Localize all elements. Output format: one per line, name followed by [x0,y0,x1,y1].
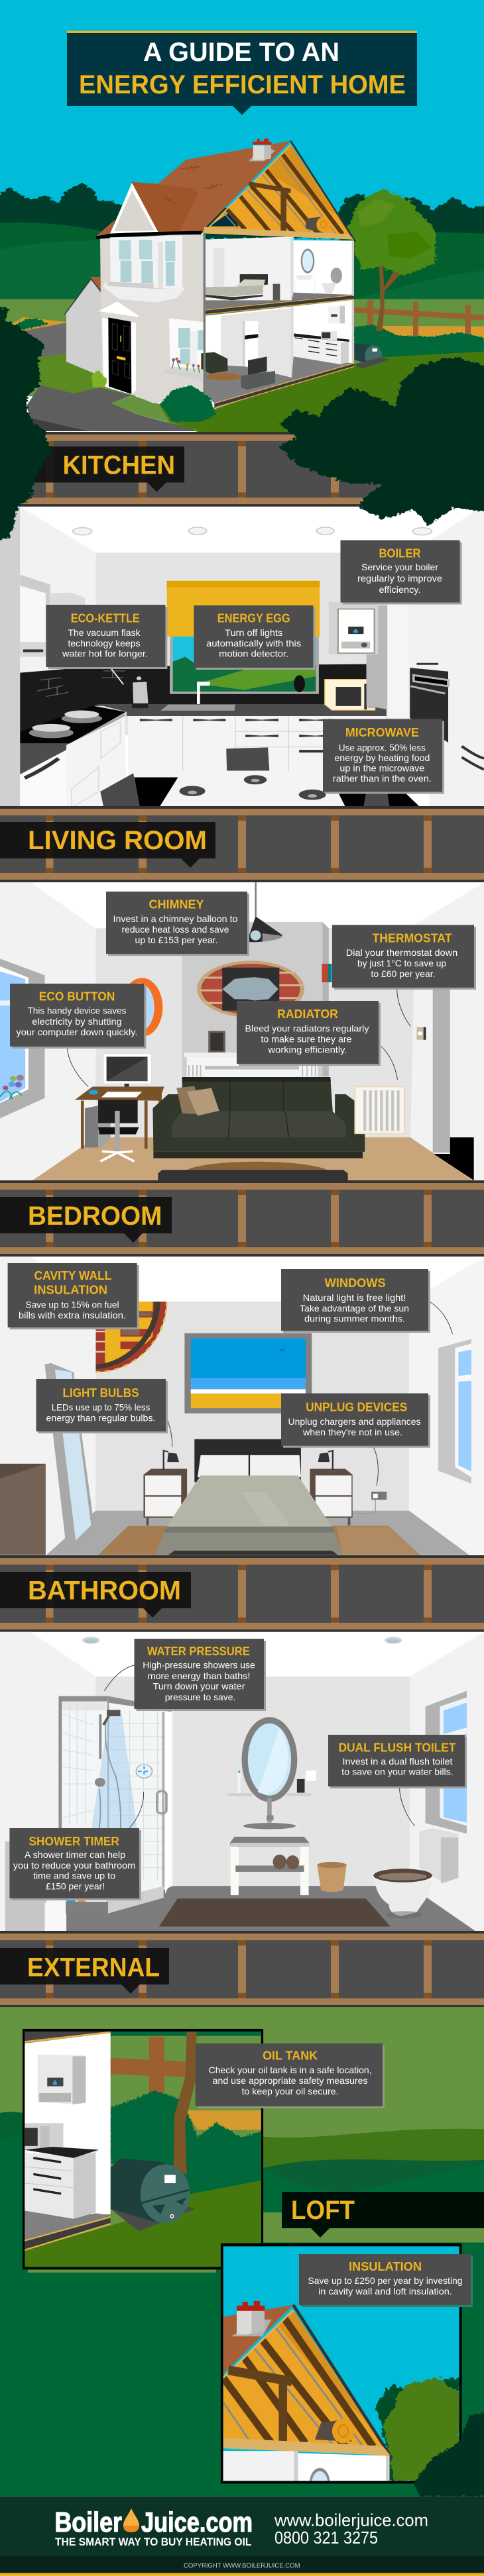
right window [438,1339,471,1484]
tap and sink [159,682,235,711]
boiler [328,306,345,323]
callout: radiator [237,1001,381,1066]
callout: windows [281,1269,430,1333]
ceiling lights [73,527,432,535]
carpet floor [32,1137,473,1180]
orange mirror [121,978,162,1037]
left foreground tree [0,305,51,543]
lower rooms [201,300,353,403]
callout: chimney [106,892,249,956]
extractor hood [49,593,85,605]
callout: shower timer: £150 per year! [46,1880,105,1891]
callout: thermostat [332,925,476,990]
section heading: external: EXTERNAL [27,1953,160,1982]
side table [263,284,280,300]
callout: cavity wall insulation: Save up to 15% on fuel [25,1300,119,1310]
section heading: bathroom: BATHROOM [28,1576,181,1606]
fireplace [184,1053,323,1077]
callout: eco-kettle: water hot for longer. [62,648,148,658]
right pillar [433,988,474,1180]
meadow [0,299,484,396]
insulation roll [315,2420,352,2442]
oil tank [354,344,390,369]
microwave [325,680,375,710]
orange strip [185,2110,261,2130]
kitchen units [25,2147,99,2219]
bottom right tree [414,2412,484,2497]
floor mirror [45,1363,94,1549]
pointer lines [67,988,410,1087]
chimney balloon cutaway [197,960,304,1017]
rug [206,373,241,380]
tv unit [248,356,267,376]
eaves [96,231,201,239]
energy egg [294,675,305,692]
boiler [329,601,378,654]
background: sky [0,0,484,331]
callout: insulation [299,2254,473,2307]
pointer lines [104,1665,415,1828]
callout: thermostat: by just 1°C to save up [357,958,446,968]
callout: eco-kettle: technology keeps [68,638,141,648]
ground floor window [164,319,204,381]
background trees [375,2378,459,2481]
bed [155,1475,343,1555]
section heading: loft: LOFT [291,2196,355,2225]
small shrub [91,370,107,387]
radiator [355,1087,404,1133]
chimney [249,138,275,161]
roof slipped tiles [164,166,222,204]
side tall cupboards [367,603,484,770]
section heading: bedroom: BEDROOM [28,1202,162,1231]
main field [0,2132,484,2497]
section heading: bathroom [0,1572,191,1618]
callout: oil tank [196,2043,385,2108]
tap and basin [239,1798,301,1839]
callout: radiator: Bleed your radiators regularly [245,1023,369,1033]
callout: eco-kettle: ECO-KETTLE [71,611,140,625]
fence [354,300,484,337]
panel: oil tank scene [23,2029,263,2269]
worktop [95,704,387,716]
house cross-section illustration [64,138,355,409]
toilet [373,1828,458,1918]
callout: oil tank: OIL TANK [263,2048,318,2063]
callout: dual flush toilet [328,1735,467,1788]
panel: bedroom scene [0,1257,484,1555]
lawn [25,2181,261,2267]
callout: microwave: Use approx. 50% less [339,742,426,752]
right window [426,1691,467,1833]
callout: insulation: in cavity wall and loft insulation. [318,2286,452,2296]
callout: water pressure: pressure to save. [165,1692,235,1702]
fence [110,2036,186,2094]
treeline [0,183,484,238]
gable [110,183,158,234]
callout: thermostat: THERMOSTAT [373,931,452,945]
pointer lines [166,1302,453,1486]
logo tagline: THE SMART WAY TO BUY HEATING OIL [55,2536,252,2548]
callout: thermostat: Dial your thermostat down [346,947,457,958]
roof [223,2305,293,2374]
callout: unplug devices: when they're not in use. [302,1427,402,1437]
callout: eco-kettle: The vacuum flask [68,627,141,638]
callout: radiator: RADIATOR [277,1007,338,1021]
callout: oil tank: Check your oil tank is in a safe location, [209,2065,372,2075]
right foreground tree [279,358,484,525]
armchair [201,352,227,374]
title line two: ENERGY EFFICIENT HOME [79,70,406,99]
road lower [28,418,90,431]
callout: boiler: BOILER [379,546,420,560]
desk and computer [75,1054,164,1161]
foliage [347,189,436,276]
callout: water pressure [134,1639,266,1711]
logo: oil drop icon [123,2508,139,2532]
callout: unplug devices: Unplug chargers and appliances [288,1416,420,1427]
callout: dual flush toilet: Invest in a dual flush toilet [342,1756,453,1767]
callout: radiator: working efficiently. [267,1045,347,1055]
callout: eco button: This handy device saves [28,1005,126,1016]
waste basket [317,1862,347,1892]
socket and cable [353,1492,387,1514]
landscape behind the house [0,183,484,396]
dining table and chairs [100,747,419,806]
loft insulation [223,2310,390,2457]
title line one: A GUIDE TO AN [143,38,339,67]
callout: energy egg: automatically with this [206,638,301,648]
callout: microwave: rather than in the oven. [333,773,432,784]
callout: windows: Natural light is free light! [303,1292,406,1303]
callout: cavity wall insulation: INSULATION [34,1282,107,1297]
callout: water pressure: more energy than baths! [148,1671,250,1681]
beam band: kitchen [0,432,484,507]
left hill [0,2112,25,2141]
tree corner [242,2255,261,2267]
callout: boiler: efficiency. [379,584,420,595]
trunk [376,254,415,331]
floor slab upper [204,294,354,315]
floor slab [25,2217,111,2250]
oval mirror [242,1717,297,1802]
section heading: living room: LIVING ROOM [28,826,207,855]
callout: water pressure: Turn down your water [152,1681,245,1692]
panel: loft scene [221,2243,461,2498]
pointer kettle [111,668,123,684]
ceiling lamp [247,882,282,942]
callout: water pressure: WATER PRESSURE [147,1644,250,1658]
bed headboard and pillows [194,1439,301,1482]
bed [240,274,268,285]
hob [20,706,126,774]
logo: brand name: Boiler [54,2506,122,2538]
callout: eco button: your computer down quickly. [16,1027,138,1037]
beam band: living room [0,806,484,882]
callout: shower timer: SHOWER TIMER [29,1834,119,1848]
section heading: bedroom [0,1197,172,1243]
flowers [172,358,200,373]
callout: oil tank: to keep your oil secure. [242,2086,339,2096]
chimney breast [182,922,332,1076]
shower cubicle [58,1696,173,1914]
kitchen units [294,333,349,364]
callout: shower timer: A shower timer can help [25,1849,125,1860]
facade [100,233,204,403]
window blind [166,581,320,637]
main roof [131,141,290,232]
callout: windows: WINDOWS [325,1276,386,1290]
callout: shower timer: time and save up to [33,1871,115,1881]
walls below [223,2451,390,2481]
callout: light bulbs: energy than regular bulbs. [46,1413,155,1423]
callout: boiler: regularly to improve [357,573,442,584]
callout: energy egg: motion detector. [219,648,288,658]
callout: cavity wall insulation: bills with extra insulation. [19,1310,126,1321]
front door [99,301,138,395]
callout: windows: Take advantage of the sun [300,1303,409,1314]
light lawn patch [111,395,201,431]
wall cupboard [20,575,50,657]
microwave [25,2123,63,2151]
beam band: bedroom [0,1180,484,1257]
gravel drive [27,386,201,431]
ground around the house [0,300,484,372]
right tree [347,189,436,331]
front bush [160,386,216,422]
panel: kitchen scene [0,505,484,806]
section heading: living room [0,822,215,868]
callout: eco button: electricity by shutting [32,1016,122,1027]
front lawn [111,352,484,433]
loft floor [223,2438,391,2455]
nightstands [143,1468,353,1525]
rug and tv bench [158,1162,348,1181]
hills [0,223,484,331]
vanity stand [230,1837,309,1895]
callout: light bulbs [36,1379,168,1433]
section heading: kitchen [30,446,184,491]
section heading: kitchen: KITCHEN [62,450,175,480]
callout: eco button: ECO BUTTON [39,990,115,1003]
callout: unplug devices: UNPLUG DEVICES [306,1400,407,1414]
left lawn [32,353,107,393]
callout: dual flush toilet: to save on your water bills. [341,1767,454,1777]
bedside lamps [157,1451,339,1472]
backsplash [20,664,367,731]
callout: chimney: CHIMNEY [149,897,204,911]
sink [295,276,313,280]
bushes behind the oil tank [354,325,484,359]
cabinet lower left [5,1841,108,1931]
callout: energy egg [194,605,315,670]
picture frame [208,1031,225,1053]
section heading: external [0,1948,169,1994]
title banner [67,30,417,115]
microwave [321,331,337,340]
bush on the left [13,319,48,331]
loft cutaway [204,141,355,242]
callout: light bulbs: LEDs use up to 75% less [52,1402,150,1412]
callout: light bulbs: LIGHT BULBS [62,1386,139,1400]
cavity wall cutaway [95,1302,170,1375]
callout: windows: during summer months. [304,1314,405,1324]
callout: microwave: up in the microwave [339,763,425,774]
callout: dual flush toilet: DUAL FLUSH TOILET [338,1741,456,1754]
bay window upper [103,236,186,303]
callout: boiler: Service your boiler [361,562,438,572]
trunk [174,2032,197,2175]
phone: 0800 321 3275 [274,2528,378,2548]
beam band: bathroom [0,1555,484,1632]
shelves with toothbrush and shaver [228,1771,316,1796]
callout: microwave: MICROWAVE [345,725,419,739]
callout: shower timer: you to reduce your bathroom [13,1860,135,1871]
grey pad [110,2206,195,2231]
floor [66,1886,475,1931]
eco-kettle [132,676,148,708]
thermostat [417,1027,426,1040]
callout: water pressure: High-pressure showers use [143,1660,255,1671]
annexe [64,277,101,376]
callout: chimney: reduce heat loss and save [122,924,229,935]
floor slab lower [213,363,354,409]
website: www.boilerjuice.com [274,2510,428,2530]
callout: chimney: Invest in a chimney balloon to [113,913,238,924]
callout: oil tank: and use appropriate safety measures [213,2075,368,2086]
kitchen floor [25,2210,111,2241]
orange paths [0,317,484,338]
callout: microwave: energy by heating food [334,752,430,763]
base cupboards [128,716,386,806]
white wall [25,2033,111,2214]
callout: thermostat: to £60 per year. [371,968,435,979]
panel: living room scene [0,882,484,1181]
callout: cavity wall insulation: CAVITY WALL [34,1268,111,1282]
cut wall edge [204,233,206,397]
ceiling lights [82,1637,402,1644]
chimney [231,2301,272,2336]
grey floor [46,1511,469,1555]
dormer roof [131,181,198,232]
wall picture window [184,1333,312,1414]
oil tank and boiler house exterior [354,344,390,369]
callout: insulation: INSULATION [349,2259,422,2273]
callout: radiator: to make sure they are [261,1034,352,1045]
wardrobe [0,1464,46,1555]
toilet [331,268,342,283]
section heading: loft [282,2192,484,2238]
callout: energy egg: Turn off lights [225,627,282,638]
callout: shower timer [9,1828,141,1900]
footer [0,2497,484,2576]
callout: eco button [10,984,146,1049]
callout: unplug devices [281,1394,430,1448]
road [0,323,66,372]
mirror [301,248,314,274]
oil tank [111,2159,190,2223]
callout: insulation: Save up to £250 per year by investing [308,2275,463,2286]
callout: eco-kettle [46,605,167,669]
logo: brand suffix: Juice.com [141,2506,253,2538]
window view [170,637,319,694]
panel: external and loft background [0,2007,484,2497]
side roof [96,220,115,236]
panel: bathroom scene [0,1632,484,1931]
callout: cavity wall insulation [8,1263,139,1329]
copyright: COPYRIGHT WWW.BOILERJUICE.COM [184,2562,300,2570]
callout: energy egg: ENERGY EGG [217,611,290,625]
callout: chimney: up to £153 per year. [135,935,217,945]
bushes [111,2090,261,2197]
hill strip [111,2032,261,2036]
rug [98,1526,420,1555]
sofa [152,1077,365,1158]
callout: microwave [323,719,444,794]
range cooker [20,717,127,806]
window left [0,958,45,1118]
bath mat [159,1898,391,1927]
upper rooms [202,227,353,311]
boiler [38,2055,86,2104]
callout: boiler [341,541,461,604]
beam band: external [0,1931,484,2008]
right hill [263,2129,484,2197]
